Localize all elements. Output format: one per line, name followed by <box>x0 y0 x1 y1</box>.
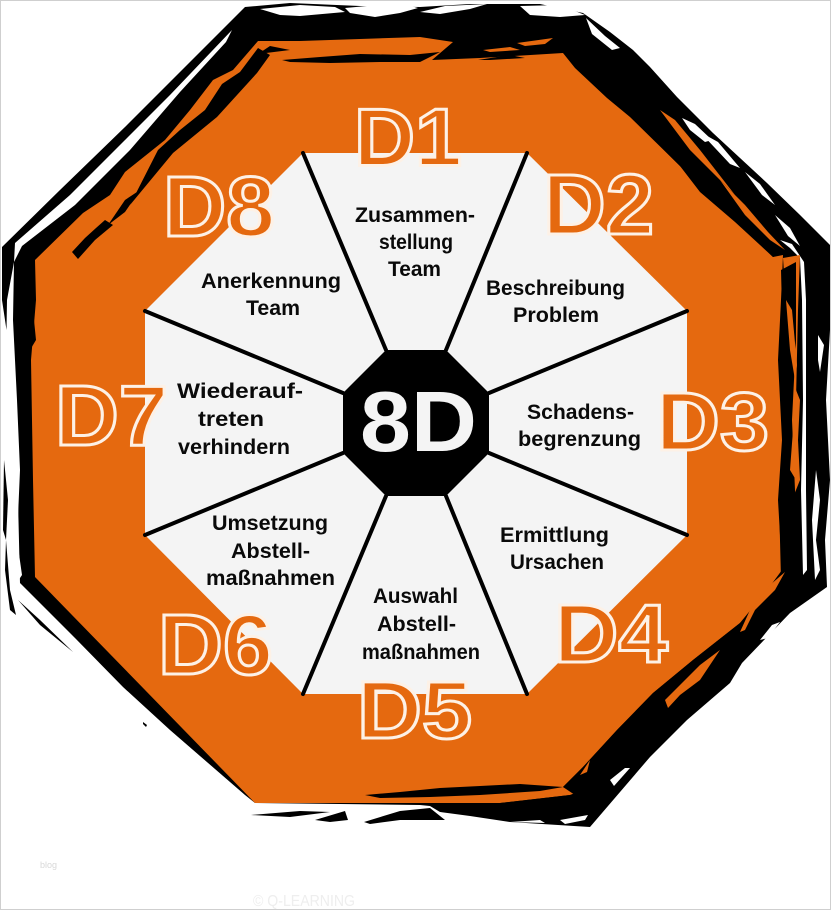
text D2: Beschreibung Problem: Beschreibung <box>486 277 625 300</box>
text D6: Umsetzung Abstellmaßnahmen: Abstell- <box>231 540 310 563</box>
text D4: Ermittlung Ursachen: Ursachen <box>510 551 604 574</box>
label D1: D1 <box>354 92 462 184</box>
text D7: Wiederauftreten verhindern: Wiederauf- <box>177 380 303 403</box>
text D6: Umsetzung Abstellmaßnahmen <box>206 512 335 590</box>
text D8: Anerkennung Team: Team <box>246 297 300 320</box>
label D3: D3 <box>656 375 769 468</box>
text D7: Wiederauftreten verhindern: verhindern <box>178 436 290 459</box>
text D1: Zusammenstellung Team: Zusammen- <box>355 204 475 227</box>
label D6: D6 <box>158 598 273 693</box>
label D5: D5 <box>357 665 472 756</box>
center hub: 8D: 8D <box>360 375 477 470</box>
text D5: Auswahl Abstellmaßnahmen: Auswahl <box>373 585 458 608</box>
watermark: copyright: © Q-LEARNING <box>253 893 355 910</box>
brush streaks on the orange field edge <box>26 38 800 812</box>
text D1: Zusammenstellung Team <box>355 204 475 281</box>
label D4: D4 <box>554 587 668 680</box>
text D5: Auswahl Abstellmaßnahmen: Abstell- <box>377 613 456 636</box>
segment divider lines <box>145 153 687 694</box>
black outer brush fragments <box>3 460 445 824</box>
text D1: Zusammenstellung Team: stellung <box>379 231 453 254</box>
text D5: Auswahl Abstellmaßnahmen <box>362 585 480 664</box>
text D8: Anerkennung Team <box>201 270 341 320</box>
label D2: D2 <box>543 158 654 253</box>
watermark: blog: blog <box>40 860 57 870</box>
label D7: D7 <box>55 369 168 464</box>
text D1: Zusammenstellung Team: Team <box>388 258 441 281</box>
text D4: Ermittlung Ursachen: Ermittlung <box>500 524 609 547</box>
text D2: Beschreibung Problem <box>486 277 625 327</box>
text D8: Anerkennung Team: Anerkennung <box>201 270 341 293</box>
center hub: 8D <box>343 350 489 496</box>
text D3: Schadensbegrenzung: Schadens- <box>527 401 634 424</box>
text D7: Wiederauftreten verhindern: treten <box>198 408 264 431</box>
text D2: Beschreibung Problem: Problem <box>513 304 599 327</box>
text D3: Schadensbegrenzung <box>518 401 641 451</box>
text D7: Wiederauftreten verhindern <box>177 380 303 459</box>
central light octagon panel <box>145 153 687 694</box>
text D3: Schadensbegrenzung: begrenzung <box>518 428 641 451</box>
text D5: Auswahl Abstellmaßnahmen: maßnahmen <box>362 641 480 664</box>
text D4: Ermittlung Ursachen <box>500 524 609 574</box>
label D8: D8 <box>163 160 275 255</box>
text D6: Umsetzung Abstellmaßnahmen: Umsetzung <box>212 512 328 535</box>
orange octagon field <box>31 37 783 803</box>
text D6: Umsetzung Abstellmaßnahmen: maßnahmen <box>206 567 335 590</box>
